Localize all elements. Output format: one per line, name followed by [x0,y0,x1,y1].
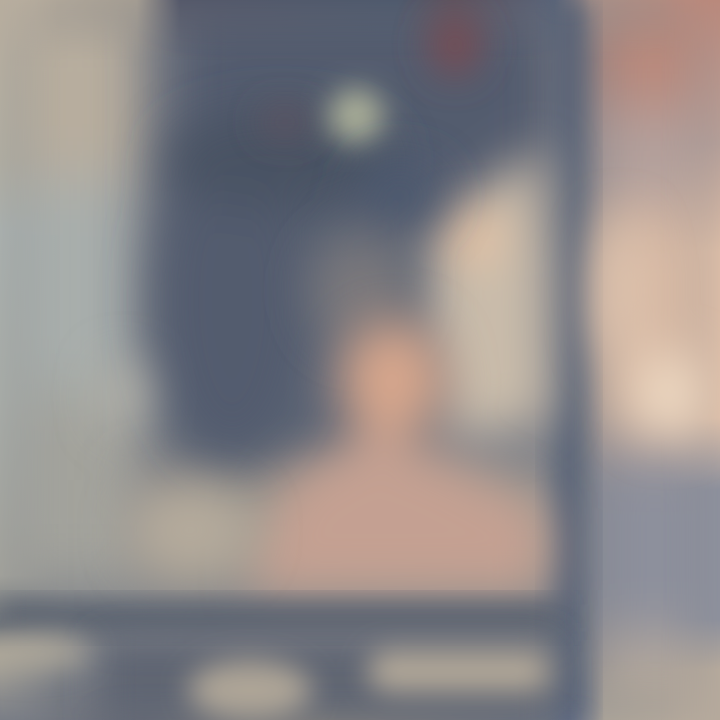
pink figure [250,320,545,592]
dark oval figure [154,110,395,460]
right glow [596,218,702,437]
panel: right column [590,0,720,720]
panel: left column [0,0,150,720]
central blue shadow [312,163,442,345]
peach panel [430,145,548,440]
vertical slate strip [552,0,586,720]
dark horizontal band [0,604,560,632]
pale green glow [328,88,384,144]
panel: centre dark background [140,0,560,590]
bottom dark floor [100,640,555,720]
red accent top [261,13,481,135]
beige lower left patch [105,363,250,572]
bottom beige shapes [0,634,550,720]
